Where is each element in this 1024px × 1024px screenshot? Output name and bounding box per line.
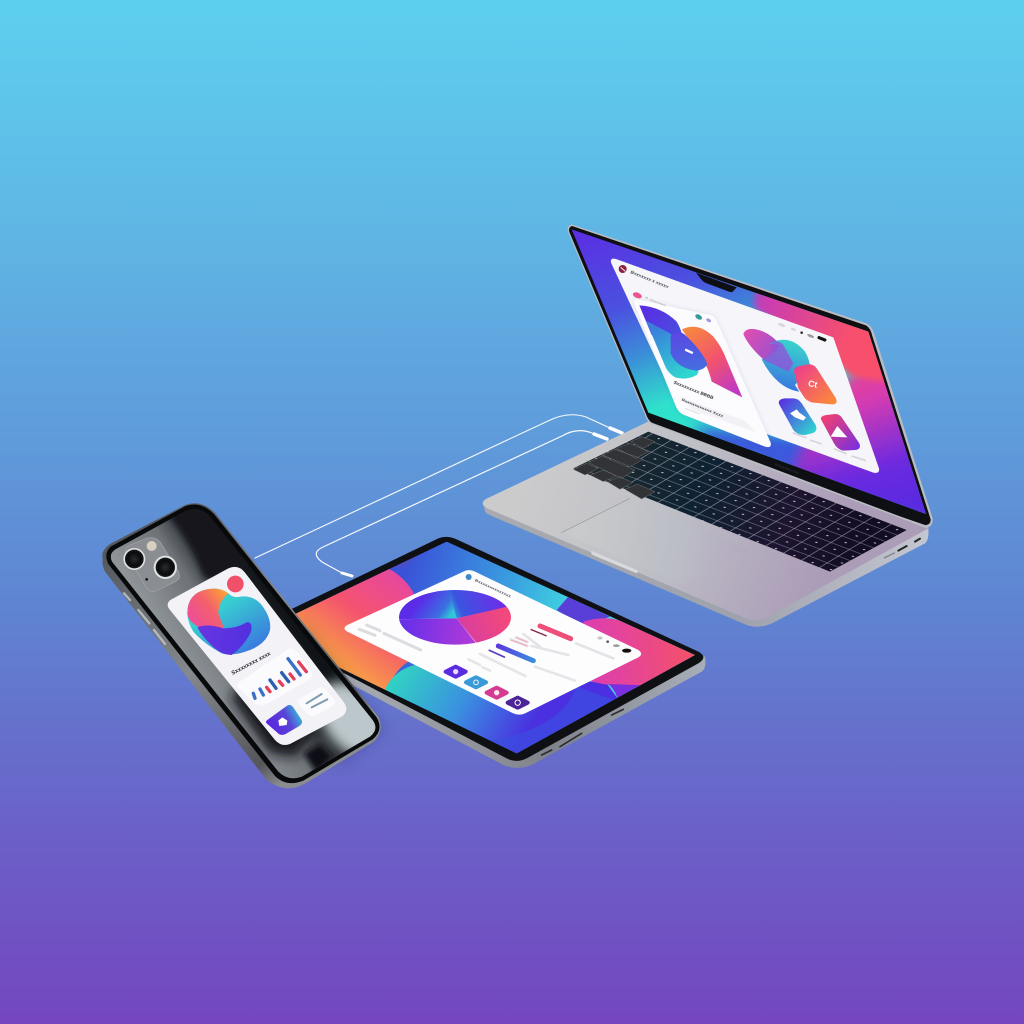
card subheading panel [678,397,757,433]
app heading: Sxxxxxxxx xxxx [231,651,273,677]
app icon: orange [794,364,837,404]
laptop base side [483,503,929,627]
phone glass [110,509,376,778]
menu tile [298,687,335,716]
app icon: hand [779,398,816,435]
cable: phone to laptop [255,415,610,558]
notch [696,273,737,292]
hinge logo text: Macbook [774,462,800,475]
window controls [597,636,631,653]
tablet title: Bxxxxxxxxxxxxxx [474,578,512,599]
tablet bezel [255,537,703,761]
window title: Bxxxxxxx x xxxxx [629,270,670,289]
connector: phone cable at laptop [610,428,622,433]
app logo [187,589,270,655]
app icon: blue [466,677,486,687]
app icon: triangle [821,414,860,451]
lid rim [568,224,933,528]
laptop base top [483,421,928,620]
connection cables [255,415,622,576]
tablet ports [542,709,623,755]
app icon: orange: Ct [807,378,818,390]
laptop app window [611,259,879,473]
tablet side [255,633,705,768]
tablet [292,536,706,768]
small app icon [266,705,302,735]
trackpad [562,498,750,585]
art: right overlapping shapes [743,329,810,392]
mini bar chart [237,649,312,706]
app icon: purple [446,667,466,677]
card heading: Sxxxxxxxxx BBBB [673,380,714,400]
app icon: magenta [487,688,507,698]
laptop lid [563,223,947,530]
phone app card [168,567,346,745]
laptop [483,223,947,627]
phone [102,503,381,788]
left card [632,291,771,447]
lid bezel [569,226,931,525]
card art shapes [639,305,742,397]
side buttons [124,593,165,644]
card label: B. Xxxxxxxx [645,296,667,308]
pink metric bar [511,626,613,658]
camera module [123,538,179,591]
keyboard [573,432,907,572]
phone body frame [102,503,381,788]
card subheading panel: Rxxxxxxxxxxx Xxxx [681,398,724,418]
ports [884,539,920,558]
dark left key block [573,437,655,499]
window title [619,265,670,289]
laptop screen wallpaper [572,230,926,514]
tablet wallpaper [296,542,695,754]
app icon: dark purple [508,698,528,708]
blue metric bar [468,646,575,681]
connector: cable at tablet [342,573,352,576]
laptop front notch [591,551,638,573]
tablet app window [344,570,641,715]
connector: tablet cable at laptop [594,434,607,439]
cable: tablet to laptop [316,431,592,573]
card label [632,291,712,323]
window controls [778,322,827,342]
phone bezel [106,504,380,783]
tablet title [466,574,512,599]
phone shadow on tablet [280,620,385,765]
left text placeholders [359,625,421,650]
pie chart [399,590,511,645]
red notification dot [227,576,244,592]
caption placeholders [793,433,866,461]
